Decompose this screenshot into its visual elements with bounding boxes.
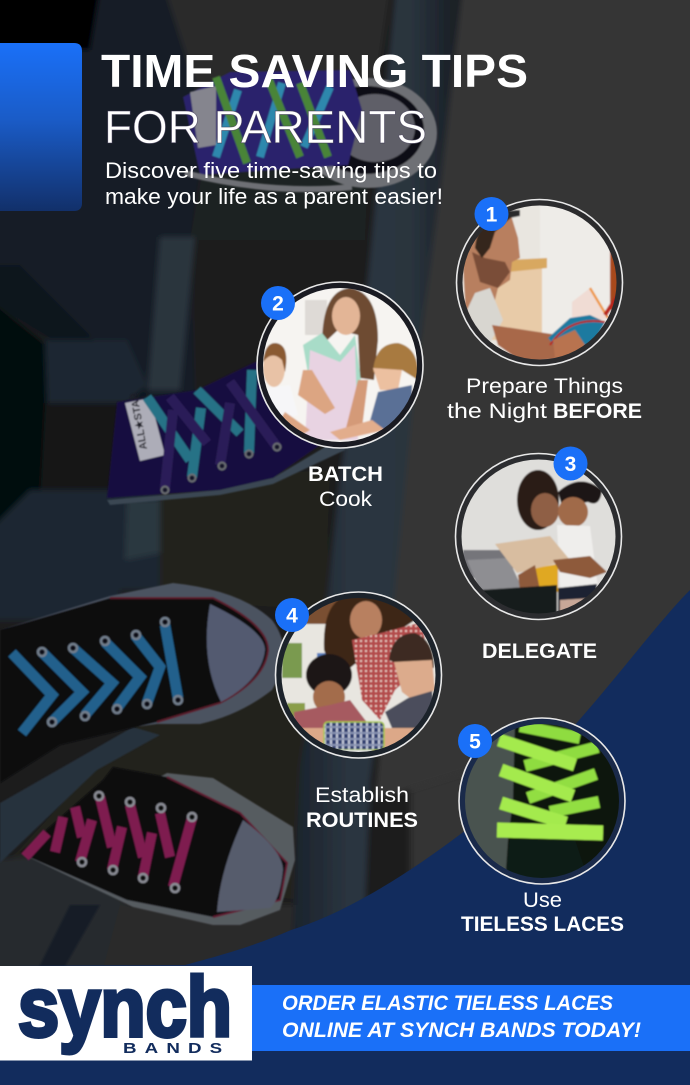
tip 3: delegate [455, 446, 622, 663]
badge 4 [275, 598, 309, 632]
label 2 [308, 463, 383, 511]
label 5 [461, 889, 624, 936]
sneaker: purple shoe [107, 345, 345, 505]
label 4 [306, 784, 418, 832]
sneaker: purple shoe: ALL★STAR [128, 391, 150, 451]
badge 5: 5 [469, 730, 481, 754]
photo: mother cooking with children [257, 282, 423, 448]
tip 4: establish routines [275, 590, 445, 832]
tip 1: prepare the night before [447, 197, 642, 423]
footer call-to-action band [252, 985, 690, 1051]
logo: synch bands: synch [18, 960, 232, 1054]
ladder bar over shoes [0, 727, 160, 863]
photo: green elastic laces [459, 718, 625, 885]
navy curved overlay [0, 590, 690, 1085]
badge 1: 1 [486, 204, 498, 226]
badge 3 [554, 446, 588, 480]
label 4: Establish [315, 784, 409, 807]
badge 5 [458, 724, 492, 758]
photo: father packing a school bag [456, 200, 622, 370]
label 2: BATCH [308, 463, 383, 486]
sneaker: top purple shoe [183, 70, 437, 189]
subtitle [105, 158, 443, 209]
label 1: the Night [447, 400, 547, 423]
sneaker: black shoe with blue laces [0, 583, 284, 783]
accent panel [0, 43, 82, 211]
call-to-action text [282, 992, 641, 1042]
subtitle: make your life as a parent easier! [105, 184, 443, 209]
title line 1: TIME SAVING TIPS [101, 45, 528, 97]
label 5: Use [523, 889, 562, 912]
badge 2 [261, 286, 295, 320]
label 1: BEFORE [553, 400, 642, 423]
call-to-action text: ORDER ELASTIC TIELESS LACES [282, 992, 613, 1015]
subtitle: Discover five time-saving tips to [105, 158, 437, 183]
tip 2: batch cook [257, 282, 423, 511]
badge 2: 2 [272, 292, 284, 316]
label 3: DELEGATE [482, 640, 597, 663]
photo: mother helping sons with homework [275, 590, 445, 760]
label 1 [447, 375, 642, 423]
title [101, 45, 528, 153]
badge 1 [474, 197, 508, 231]
tip 5: tieless laces [458, 718, 625, 936]
label 2: Cook [319, 488, 373, 511]
badge 3: 3 [565, 453, 576, 476]
label 4: ROUTINES [306, 809, 418, 832]
badge 4: 4 [286, 604, 298, 628]
call-to-action text: ONLINE AT SYNCH BANDS TODAY! [282, 1019, 641, 1042]
photo: mother and daughter reading [455, 454, 622, 625]
label 1: Prepare Things [466, 375, 623, 398]
label 5: TIELESS LACES [461, 913, 624, 936]
sneaker: black shoe with pink laces [20, 767, 295, 925]
title line 2: FOR PARENTS [104, 101, 427, 153]
logo: synch bands: BANDS [123, 1040, 230, 1057]
